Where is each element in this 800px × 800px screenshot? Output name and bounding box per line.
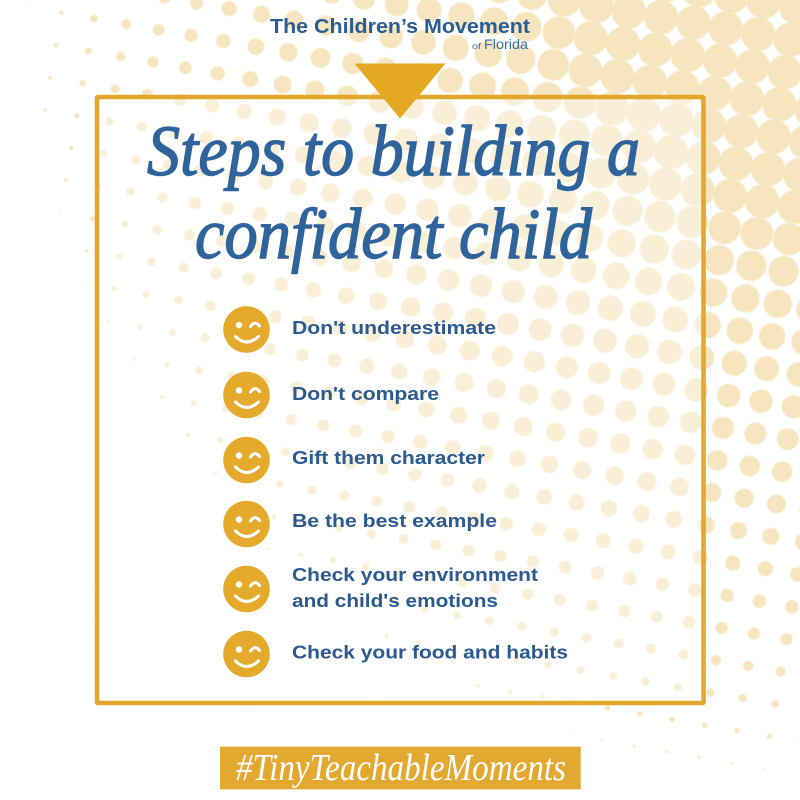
title: Steps to building a confident child: confident child (195, 194, 593, 274)
icon: winking smiley (223, 437, 270, 483)
logo: The Children's Movement of Florida: Florida (484, 36, 528, 52)
step 5: Check your environment and child's emotions: Check your environment (292, 565, 538, 585)
step 4: Be the best example: Be the best example (292, 511, 497, 531)
logo: The Children's Movement of Florida: The Children’s Movement (270, 15, 530, 38)
step 2: Don't compare (223, 372, 439, 418)
icon: downward triangle (354, 64, 446, 118)
title: Steps to building a confident child (147, 111, 640, 274)
step 1: Don't underestimate: Don't underestimate (292, 318, 496, 338)
icon: winking smiley (223, 501, 270, 547)
step 5: Check your environment and child's emotions (223, 565, 538, 612)
step 6: Check your food and habits (223, 631, 568, 677)
step 4: Be the best example (223, 501, 497, 547)
icon: winking smiley (223, 306, 270, 353)
banner: #TinyTeachableMoments hashtag: #TinyTeachableMoments (236, 747, 566, 789)
title: Steps to building a confident child: Steps to building a (147, 111, 640, 191)
logo: The Children's Movement of Florida: of (472, 41, 482, 51)
step 1: Don't underestimate (223, 306, 496, 353)
logo: The Children's Movement of Florida (270, 15, 530, 52)
icon: winking smiley (223, 566, 270, 612)
step 3: Gift them character: Gift them character (292, 448, 485, 468)
panel: framed content box (97, 97, 704, 703)
step 2: Don't compare: Don't compare (292, 384, 439, 404)
step 5: Check your environment and child's emotions: and child's emotions (292, 591, 498, 611)
step 6: Check your food and habits: Check your food and habits (292, 642, 568, 662)
step 3: Gift them character (223, 437, 485, 483)
icon: winking smiley (223, 372, 270, 418)
icon: winking smiley (223, 631, 270, 677)
